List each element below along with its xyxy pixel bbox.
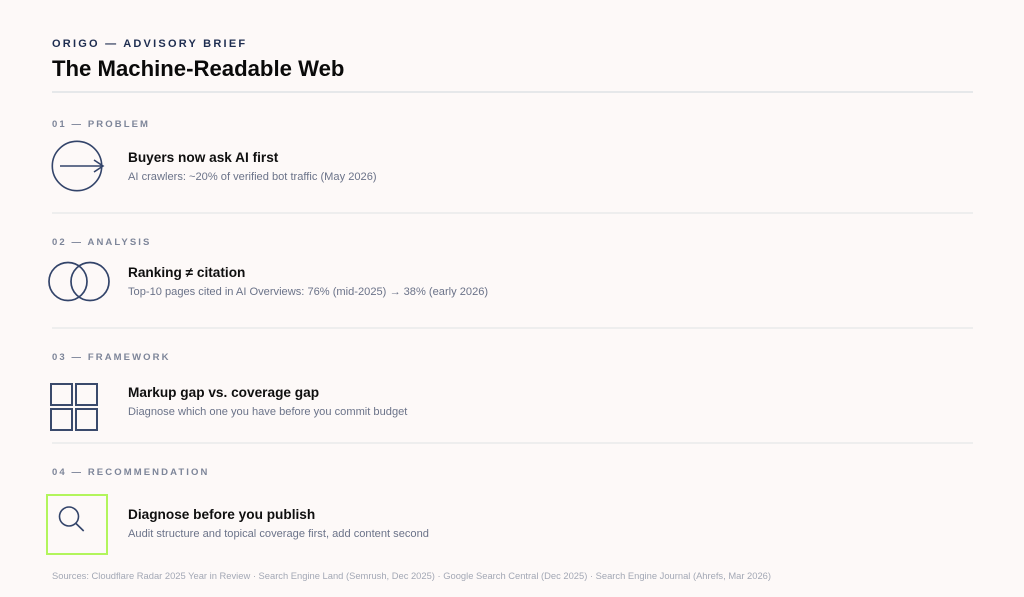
heading: Diagnose before you publish: [128, 507, 315, 522]
section label: 03 — FRAMEWORK: [52, 352, 171, 363]
description: Top-10 pages cited in AI Overviews: 76% (mid-2025) → 38% (early 2026): [128, 286, 488, 298]
description: Diagnose which one you have before you commit budget: [128, 406, 407, 418]
section label: 01 — PROBLEM: [52, 119, 150, 130]
header rule: [52, 91, 973, 93]
section label: 02 — ANALYSIS: [52, 237, 151, 248]
panel: 03 framework: [50, 352, 408, 431]
panel: 02 analysis: [48, 237, 488, 302]
panel: 01 problem: [52, 119, 377, 192]
icon: magnifier in lime box: [46, 494, 108, 555]
icon: overlapping circles: [48, 262, 110, 302]
sources footnote: Sources: Cloudflare Radar 2025 Year in Review · Search Engine Land (Semrush, Dec 2025) · Google Search Central (Dec 2025) · Search Engine Journal (Ahrefs, Mar 2026): [52, 571, 771, 581]
description: Audit structure and topical coverage first, add content second: [128, 528, 429, 540]
kicker: ORIGO — ADVISORY BRIEF: [52, 38, 247, 50]
heading: Markup gap vs. coverage gap: [128, 385, 319, 400]
title: The Machine-Readable Web: [52, 56, 344, 81]
icon: four squares: [50, 383, 98, 431]
panel: 04 recommendation: [46, 467, 429, 555]
icon: circle with arrow: [52, 140, 104, 192]
heading: Ranking ≠ citation: [128, 265, 245, 280]
heading: Buyers now ask AI first: [128, 150, 278, 165]
header: [52, 38, 973, 93]
description: AI crawlers: ~20% of verified bot traffic (May 2026): [128, 171, 377, 183]
section label: 04 — RECOMMENDATION: [52, 467, 209, 478]
